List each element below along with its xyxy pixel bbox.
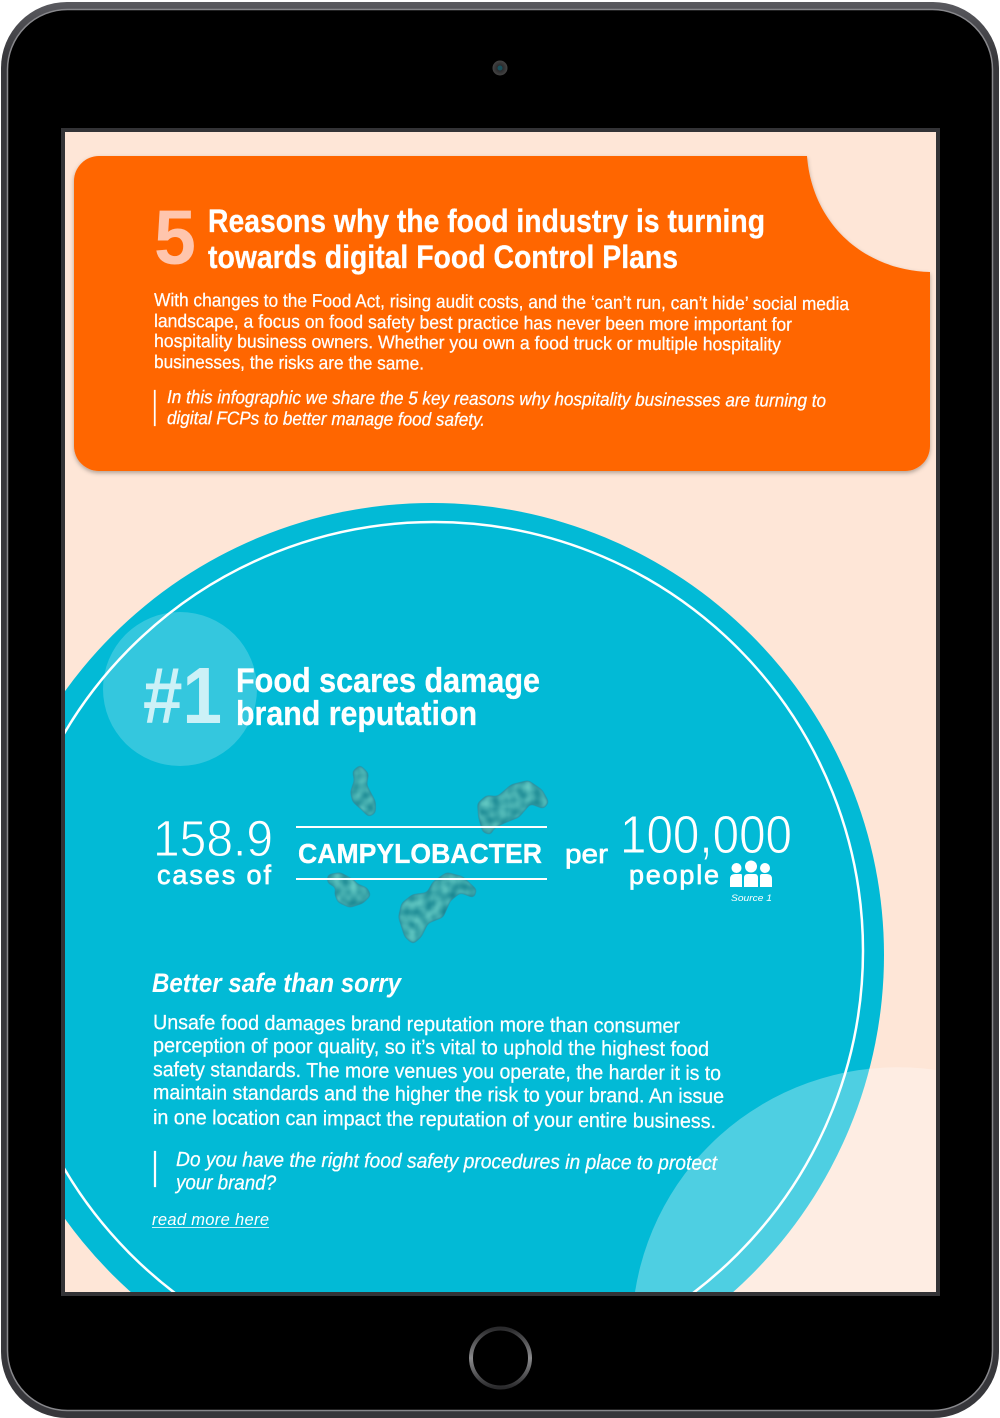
intro quote: In this infographic we share the 5 key reasons why hospitality businesses are turning to: [167, 386, 826, 411]
stat: 158.9 cases of: 158.9: [153, 810, 273, 867]
icon: people group: [730, 860, 772, 887]
reason 1 heading: [236, 662, 540, 733]
heading: [208, 203, 765, 275]
fraction divider lines: [296, 826, 547, 880]
intro quote: [154, 386, 826, 430]
reason 1 number: #1: [143, 651, 222, 740]
body text: [153, 1011, 724, 1133]
source note: Source 1: [731, 893, 772, 903]
subheading: Better safe than sorry: [152, 968, 403, 998]
panel: orange intro: [74, 156, 930, 471]
callout question: Do you have the right food safety procedures in place to protect: [176, 1148, 718, 1175]
tablet screen: [65, 132, 936, 1292]
body text: perception of poor quality, so it’s vital to uphold the highest food: [153, 1034, 709, 1061]
decorative light circle behind number: [103, 612, 257, 766]
intro text: [154, 289, 850, 374]
stat: 100,000 people: 100,000: [620, 805, 792, 865]
body text: safety standards. The more venues you operate, the harder it is to: [153, 1058, 721, 1085]
stat: 158.9 cases of: cases of: [157, 860, 271, 890]
intro text: hospitality business owners. Whether you own a food truck or multiple hospitality: [154, 330, 782, 355]
intro quote: digital FCPs to better manage food safety.: [167, 407, 485, 430]
reason 1 heading: Food scares damage: [236, 662, 540, 700]
callout question: [154, 1148, 718, 1195]
intro text: landscape, a focus on food safety best practice has never been more important for: [154, 310, 792, 335]
icon: front camera: [492, 60, 508, 76]
callout question: your brand?: [174, 1171, 277, 1195]
heading: Reasons why the food industry is turning: [208, 203, 765, 239]
stat: 100,000 people: people: [629, 860, 719, 890]
body text: in one location can impact the reputation of your entire business.: [153, 1106, 716, 1133]
panel: big teal circle: [65, 503, 884, 1292]
intro text: businesses, the risks are the same.: [154, 351, 424, 374]
big number 5: 5: [154, 195, 196, 281]
intro text: With changes to the Food Act, rising audit costs, and the ‘can’t run, can’t hide’ social media: [154, 289, 850, 314]
body text: Unsafe food damages brand reputation more than consumer: [153, 1011, 680, 1038]
decorative light circle bottom right: [635, 1067, 936, 1292]
stat: per: per: [565, 839, 608, 869]
bacteria illustrations: [329, 767, 547, 942]
stat: campylobacter: CAMPYLOBACTER: [298, 838, 542, 869]
stat: 100,000 people: [624, 816, 790, 890]
heading: towards digital Food Control Plans: [208, 239, 678, 275]
body text: maintain standards and the higher the risk to your brand. An issue: [153, 1081, 724, 1108]
reason 1 heading: brand reputation: [236, 695, 477, 733]
orange panel shape: [74, 156, 930, 471]
read more link: read more here: [152, 1211, 269, 1229]
icon: home button: [471, 1328, 530, 1388]
stat: 158.9 cases of: [157, 820, 272, 885]
